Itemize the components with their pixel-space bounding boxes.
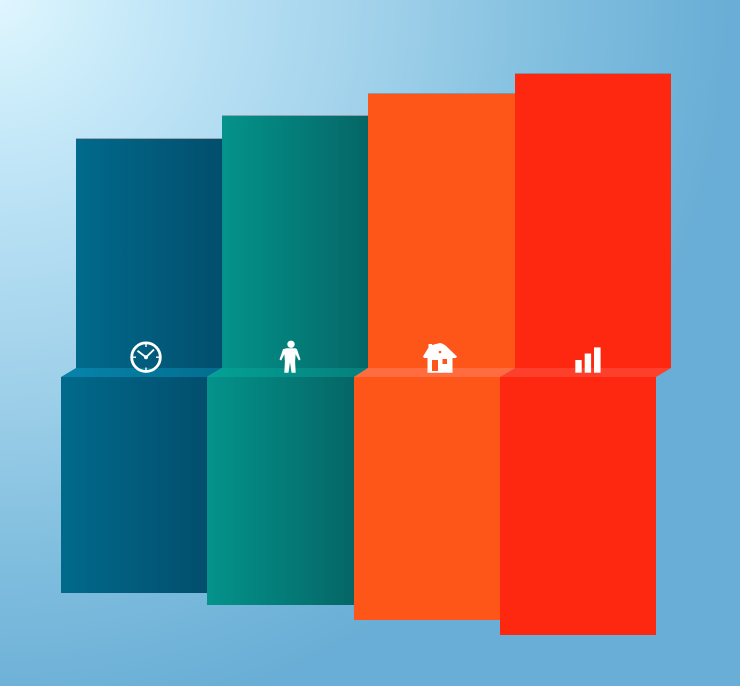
bar 2: teal (207, 116, 368, 605)
step: orange (354, 368, 515, 377)
step: red (500, 368, 671, 377)
bar 1: blue (61, 139, 222, 593)
upper panel: orange (368, 94, 515, 368)
icon: bar chart (575, 347, 601, 373)
bar 4: red (500, 74, 671, 635)
lower panel: blue (61, 377, 207, 593)
upper panel: blue (76, 139, 222, 368)
upper panel: teal (222, 116, 368, 368)
lower panel: red (500, 377, 656, 635)
upper panel: red (515, 74, 671, 368)
icon: person (279, 341, 300, 373)
icon: clock (132, 343, 160, 372)
step: blue (61, 368, 222, 377)
lower panel: teal (207, 377, 354, 605)
lower panel: orange (354, 377, 500, 620)
icon: house (423, 343, 457, 373)
bar 3: orange (354, 94, 515, 620)
step: teal (207, 368, 368, 377)
